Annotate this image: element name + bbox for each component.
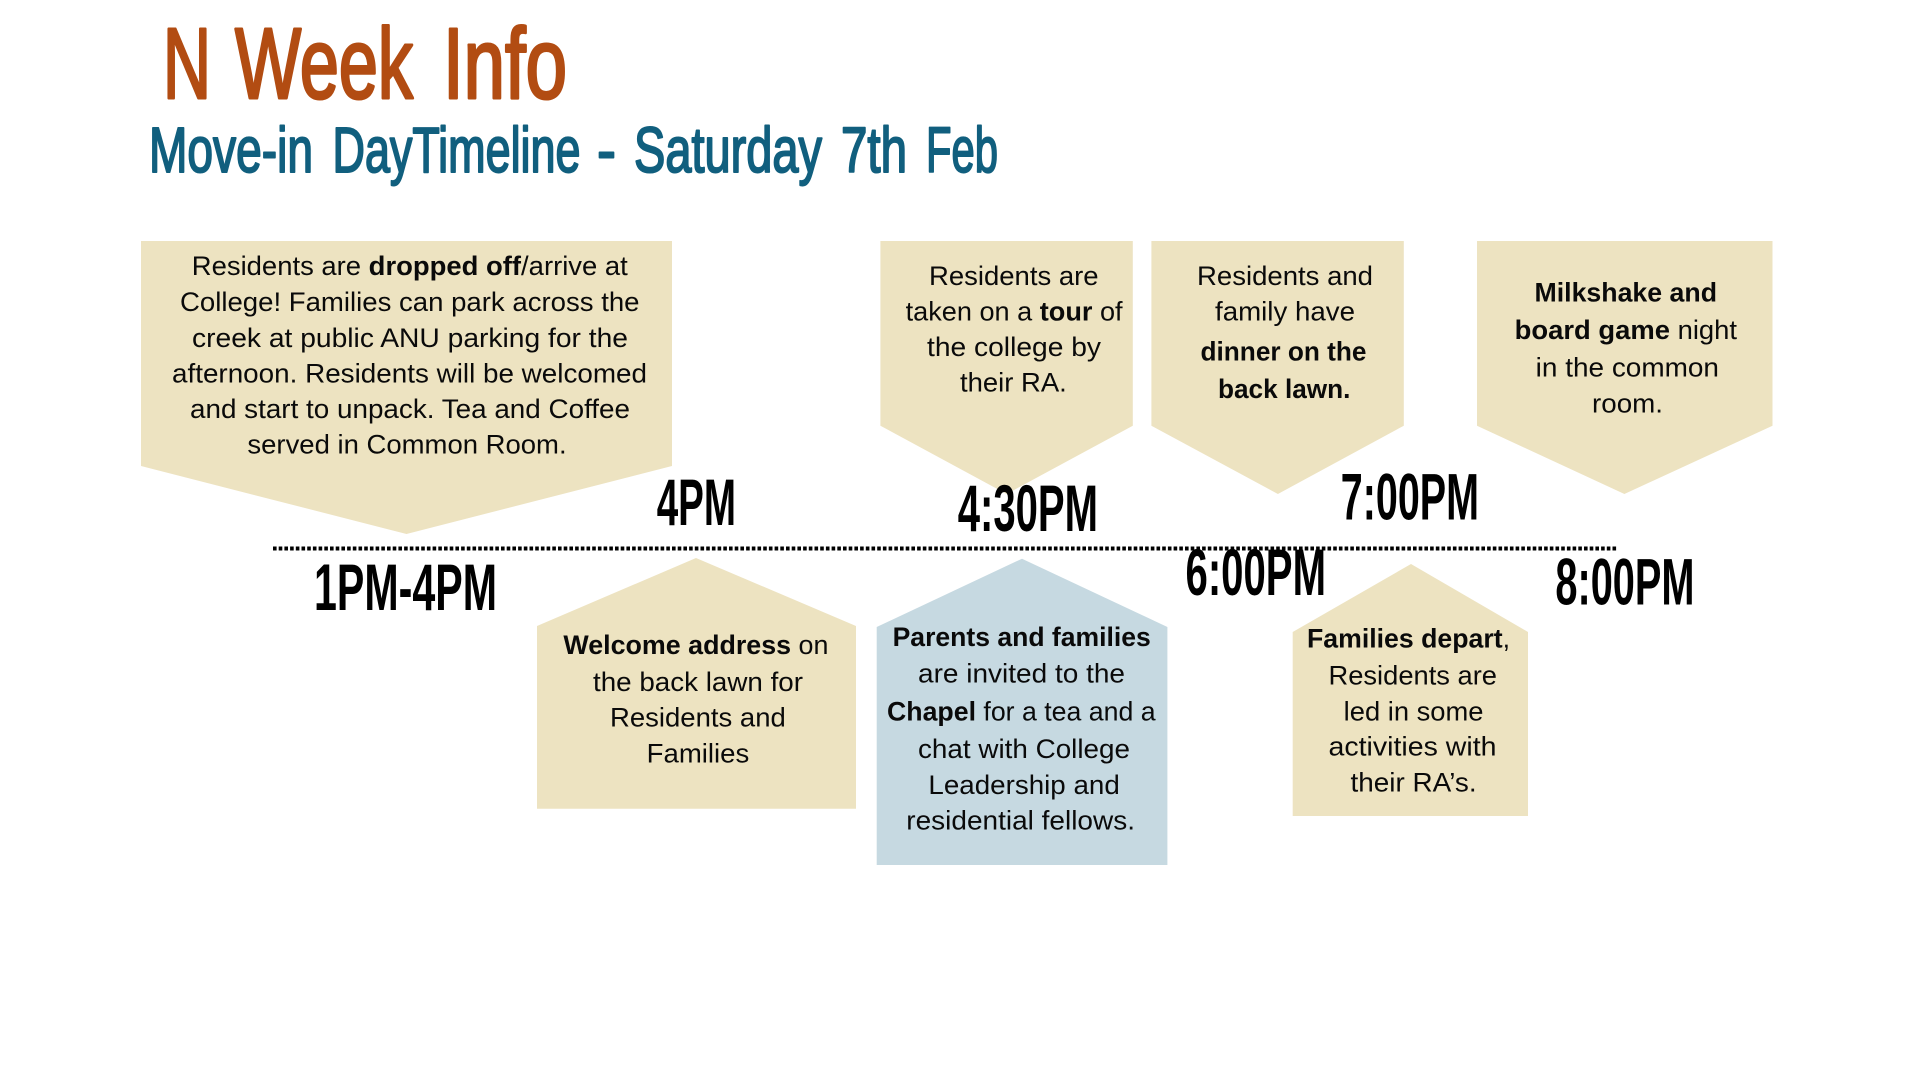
panel text: drop off: and start to unpack. Tea and Coffee <box>190 394 630 424</box>
panel text: dinner: back lawn. <box>1218 374 1350 404</box>
panel text: chapel: Leadership and <box>928 770 1120 800</box>
panel text: tour: their RA. <box>960 368 1067 398</box>
panel: 1pm-4pm drop off <box>141 241 672 534</box>
panel text: tour <box>906 261 1123 398</box>
time label: 6:00pm: 6:00PM <box>1186 535 1326 609</box>
time label: 1pm-4pm: 1PM-4PM <box>314 550 497 624</box>
panel text: families depart: activities with <box>1328 732 1496 762</box>
panel text: drop off: afternoon. Residents will be welcomed <box>172 358 647 388</box>
panel: parents and families chapel tea <box>877 559 1167 865</box>
panel text: drop off: creek at public ANU parking for the <box>192 323 628 353</box>
time label: 7:00pm: 7:00PM <box>1341 460 1479 534</box>
panel text: milkshake: in the common <box>1536 353 1719 383</box>
panel text: milkshake <box>1515 278 1738 419</box>
panel text: chapel: are invited to the <box>918 659 1125 689</box>
time label: 8:00pm: 8:00PM <box>1555 544 1694 618</box>
panel text: chapel: chat with College <box>918 734 1130 764</box>
panel text: dinner: family have <box>1215 297 1355 327</box>
panel text: tour: the college by <box>927 332 1102 362</box>
panel text: dinner: Residents and <box>1197 261 1373 291</box>
panel text: families depart: Families depart, <box>1307 623 1510 653</box>
subtitle: 7th <box>841 114 907 186</box>
panel text: families depart: their RA’s. <box>1350 768 1477 798</box>
panel text: welcome: Residents and <box>610 703 786 733</box>
subtitle: DayTimeline <box>332 114 580 186</box>
subtitle: Feb <box>926 114 998 186</box>
panel text: dinner: dinner on the <box>1200 337 1366 367</box>
panel text: milkshake: room. <box>1592 389 1663 419</box>
panel text: tour: Residents are <box>929 261 1099 291</box>
panel: 7:00pm families depart <box>1293 564 1528 816</box>
panel text: chapel: residential fellows. <box>906 805 1135 835</box>
panel text: drop off: Residents are dropped off/arrive at <box>192 251 628 281</box>
time label: 4pm: 4PM <box>657 465 736 539</box>
title: Info <box>443 8 567 120</box>
panel text: families depart: led in some <box>1344 697 1484 727</box>
time label: 4:30pm: 4:30PM <box>958 471 1098 545</box>
title: N <box>163 8 211 120</box>
panel text: welcome: the back lawn for <box>593 667 803 697</box>
panel text: welcome <box>563 630 828 768</box>
subtitle: Move-in <box>149 114 313 186</box>
title <box>163 8 567 120</box>
panel text: chapel <box>887 622 1156 835</box>
panel: 4pm welcome address <box>537 558 856 809</box>
subtitle: - <box>597 114 616 186</box>
panel text: chapel: Parents and families <box>893 622 1151 652</box>
panel text: welcome: Families <box>647 738 749 768</box>
panel text: families depart <box>1307 623 1510 798</box>
panel: 8:00pm milkshake <box>1477 241 1772 494</box>
title: Week <box>235 8 414 120</box>
panel text: drop off <box>172 251 647 460</box>
panel text: welcome: Welcome address on <box>563 630 828 660</box>
timeline dotted line <box>273 546 1618 550</box>
subtitle: Saturday <box>634 114 822 186</box>
panel text: drop off: College! Families can park across the <box>180 287 640 317</box>
panel text: drop off: served in Common Room. <box>247 430 567 460</box>
subtitle <box>149 114 998 186</box>
panel text: milkshake: board game night <box>1515 315 1738 345</box>
panel: 6:00pm dinner <box>1151 241 1404 494</box>
panel text: chapel: Chapel for a tea and a <box>887 697 1156 727</box>
panel: 4:30pm tour <box>880 241 1133 494</box>
panel text: families depart: Residents are <box>1328 660 1497 690</box>
panel text: milkshake: Milkshake and <box>1534 278 1717 308</box>
panel text: dinner <box>1197 261 1373 404</box>
panel text: tour: taken on a tour of <box>906 297 1123 327</box>
